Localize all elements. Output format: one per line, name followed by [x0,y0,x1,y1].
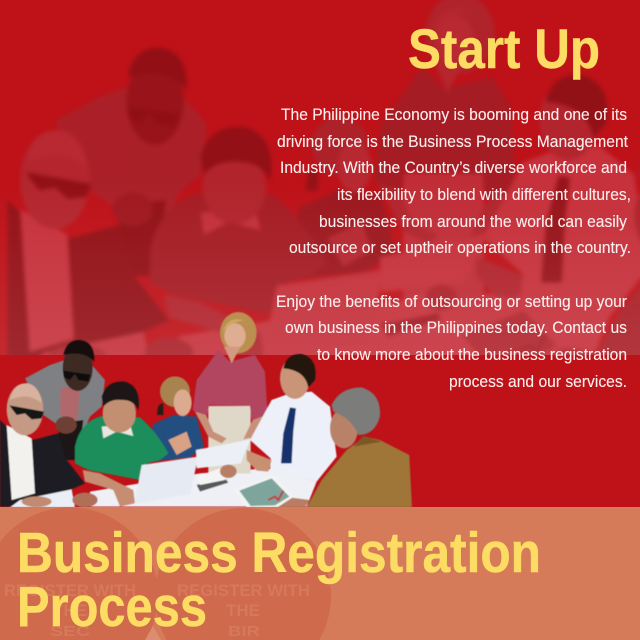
salmon band [0,507,640,640]
arrow between steps [145,626,161,640]
text block: intro paragraph: driving force is the Business Process Management [277,133,628,151]
person: older man in tan jacket [277,387,412,507]
text block: call to action paragraph: process and our services. [449,373,627,391]
person: man with glasses in grey jacket [25,340,105,460]
text block: intro paragraph: Industry. With the Country’s diverse workforce and [280,159,627,177]
icon: tablet with chart [233,475,294,507]
document: open laptop and papers [134,439,251,504]
text block: intro paragraph: its flexibility to blend with different cultures, [337,186,631,204]
step circle: register with the SEC: THE [53,601,87,620]
text block: call to action paragraph: to know more about the business registration [317,346,627,364]
table [90,468,317,507]
person: smiling man in white shirt and blue tie [247,354,337,482]
heading: Business Registration Process [17,521,541,639]
person: standing woman in pink blouse [193,312,268,473]
text block: intro paragraph: businesses from around the world can easily [319,213,628,231]
heading: Start Up: Start Up [408,17,600,80]
person: bald man in dark suit [0,383,98,507]
photo: business team around a table [0,312,412,507]
step circle: register with the BIR: REGISTER WITH [177,581,310,600]
step circle: register with the BIR [155,508,331,640]
text block: call to action paragraph: own business in the Philippines today. Contact us [285,319,627,337]
step circle: register with the SEC: SEC [50,623,90,640]
text block: intro paragraph [277,106,631,257]
text block: call to action paragraph [276,293,627,391]
text block: call to action paragraph: Enjoy the benefits of outsourcing or setting up your [276,293,627,311]
person: seated woman in blue jacket [146,376,204,463]
person: man in green sweater [75,382,168,507]
text block: intro paragraph: The Philippine Economy is booming and one of its [281,106,627,124]
faded background photo of the team [0,0,640,366]
step circle: register with the BIR: THE [226,601,260,620]
step circle: register with the SEC [0,507,158,640]
heading: Business Registration Process: Process [17,575,207,639]
step circle: register with the BIR: BIR [228,623,260,640]
heading: Business Registration Process: Business Registration [17,521,541,585]
step circle: register with the SEC: REGISTER WITH [4,581,136,600]
